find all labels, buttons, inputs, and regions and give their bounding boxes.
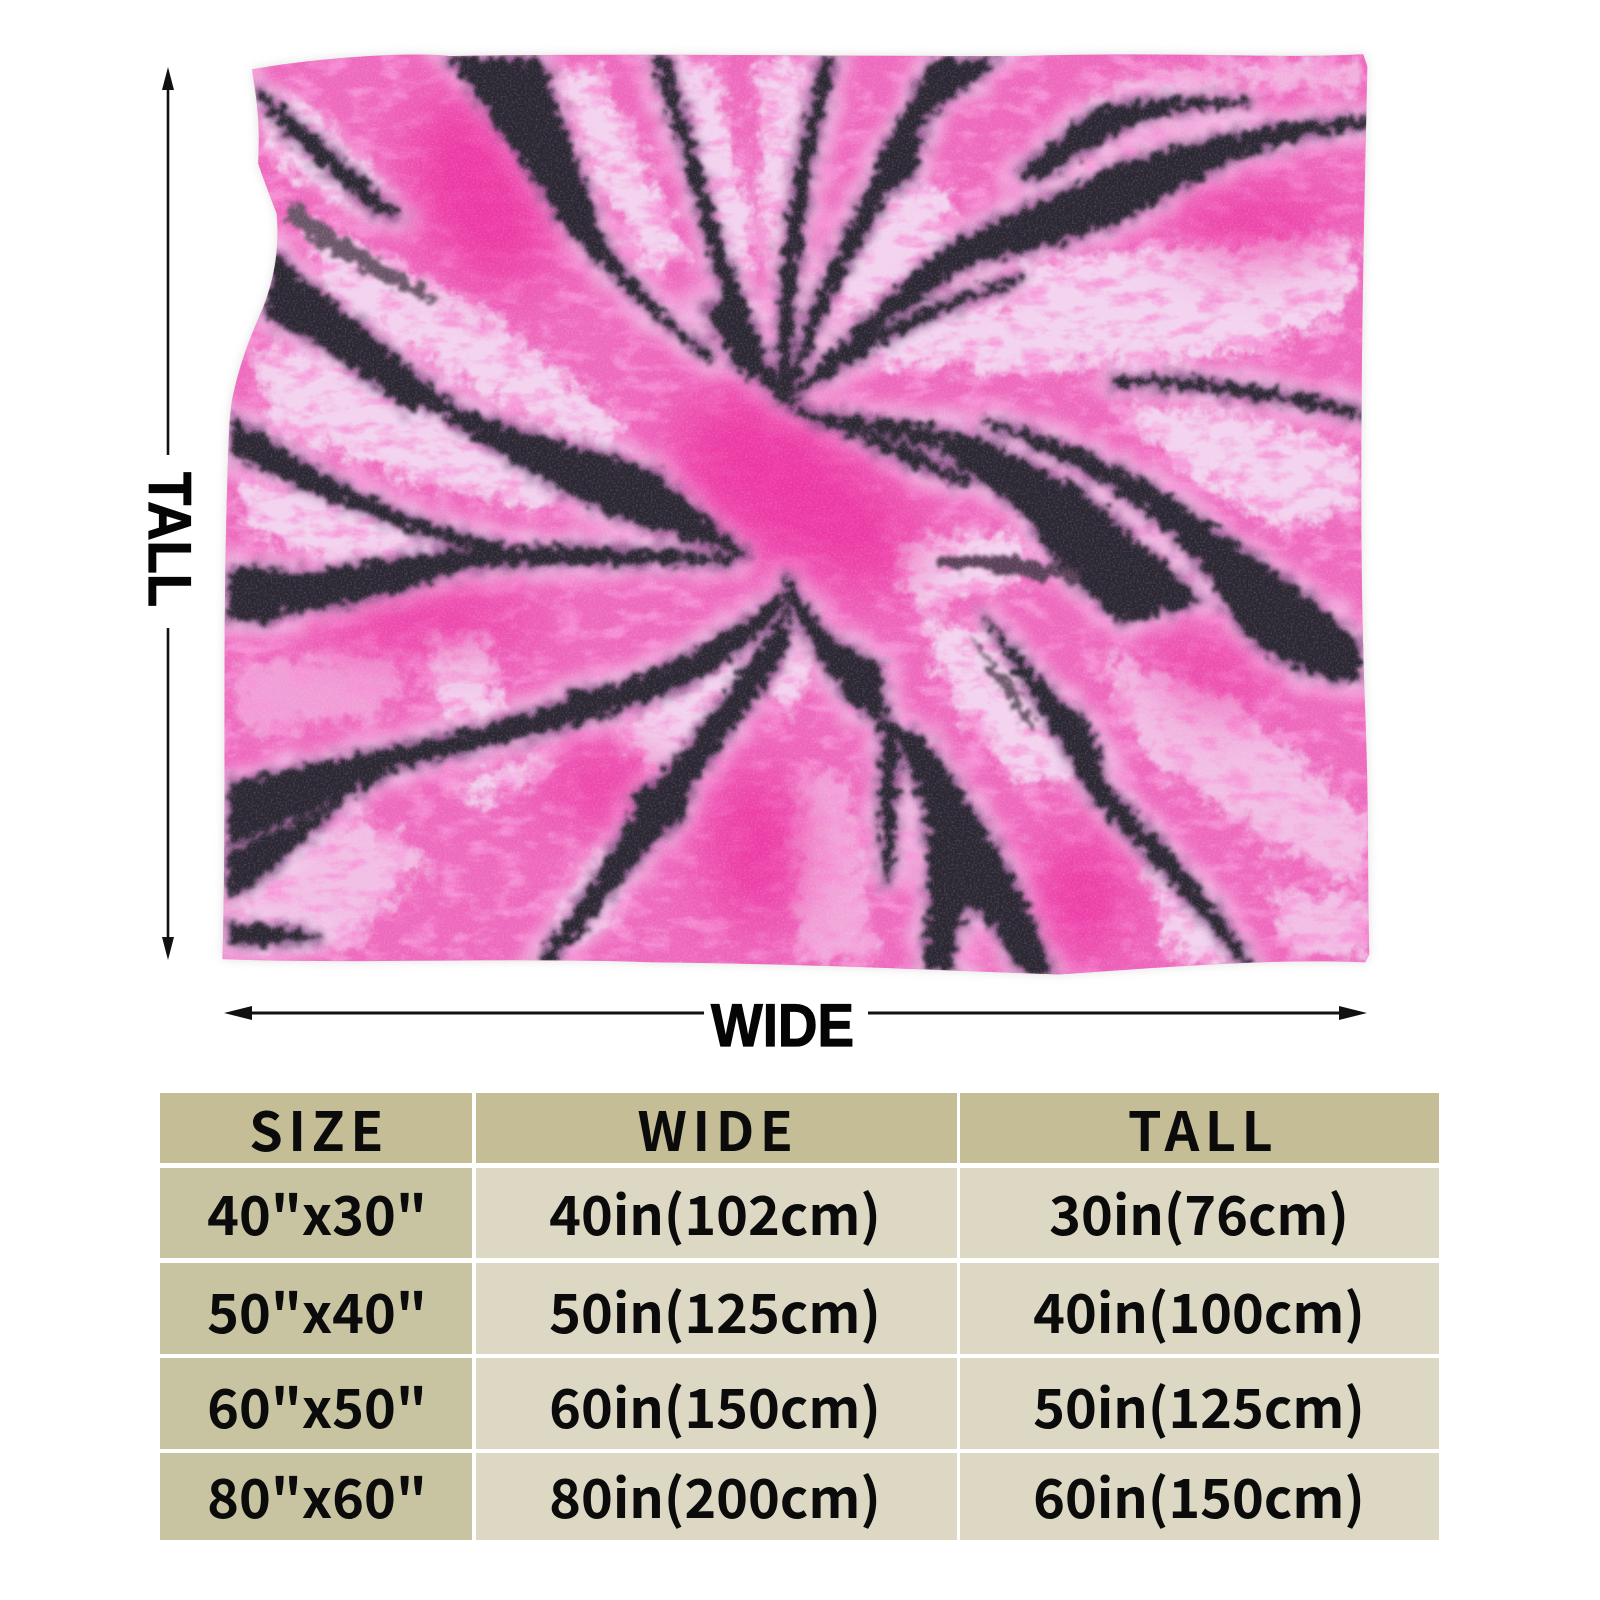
row 50x40: 50in(125cm) — [549, 1270, 881, 1349]
saturated pink zones — [316, 76, 1337, 959]
row 40x30 — [160, 1168, 1439, 1258]
row 60x50: 60in(150cm) — [549, 1365, 881, 1444]
infographic canvas — [148, 52, 1439, 1540]
row 50x40: 50"x40" — [207, 1270, 427, 1349]
gray and purple secondary streaks — [286, 199, 1082, 727]
row 60x50: 60"x50" — [207, 1365, 427, 1444]
row 80x60 — [160, 1453, 1439, 1540]
row 40x30: 40in(102cm) — [549, 1172, 881, 1251]
table header row — [160, 1088, 1439, 1167]
mottled pink over the pale areas — [204, 41, 1388, 990]
dimension arrow: tall — [162, 67, 174, 960]
mauve bleed around dark streaks — [230, 57, 1365, 974]
table header row: SIZE — [249, 1088, 389, 1167]
row 80x60: 80"x60" — [207, 1455, 427, 1534]
row 40x30: 40"x30" — [207, 1172, 427, 1251]
row 80x60: 80in(200cm) — [549, 1455, 881, 1534]
table header row: TALL — [1128, 1088, 1278, 1167]
blanket photo: pink and black tie-dye — [204, 41, 1388, 990]
table header row: WIDE — [638, 1088, 798, 1167]
row 60x50 — [160, 1358, 1439, 1449]
pale halo hugging the dark streaks — [230, 57, 1365, 974]
dimension arrow: wide — [224, 1006, 1367, 1020]
row 60x50: 50in(125cm) — [1033, 1365, 1365, 1444]
dark dye streaks — [230, 57, 1365, 974]
pale streaks — [235, 61, 1367, 959]
row 50x40 — [160, 1263, 1439, 1354]
row 80x60: 60in(150cm) — [1033, 1455, 1365, 1534]
label: TALL: TALL — [136, 472, 203, 607]
fabric grain — [204, 41, 1388, 990]
size table — [160, 1088, 1439, 1540]
row 40x30: 30in(76cm) — [1049, 1172, 1349, 1251]
row 50x40: 40in(100cm) — [1033, 1270, 1365, 1349]
label: WIDE: WIDE — [711, 992, 854, 1059]
